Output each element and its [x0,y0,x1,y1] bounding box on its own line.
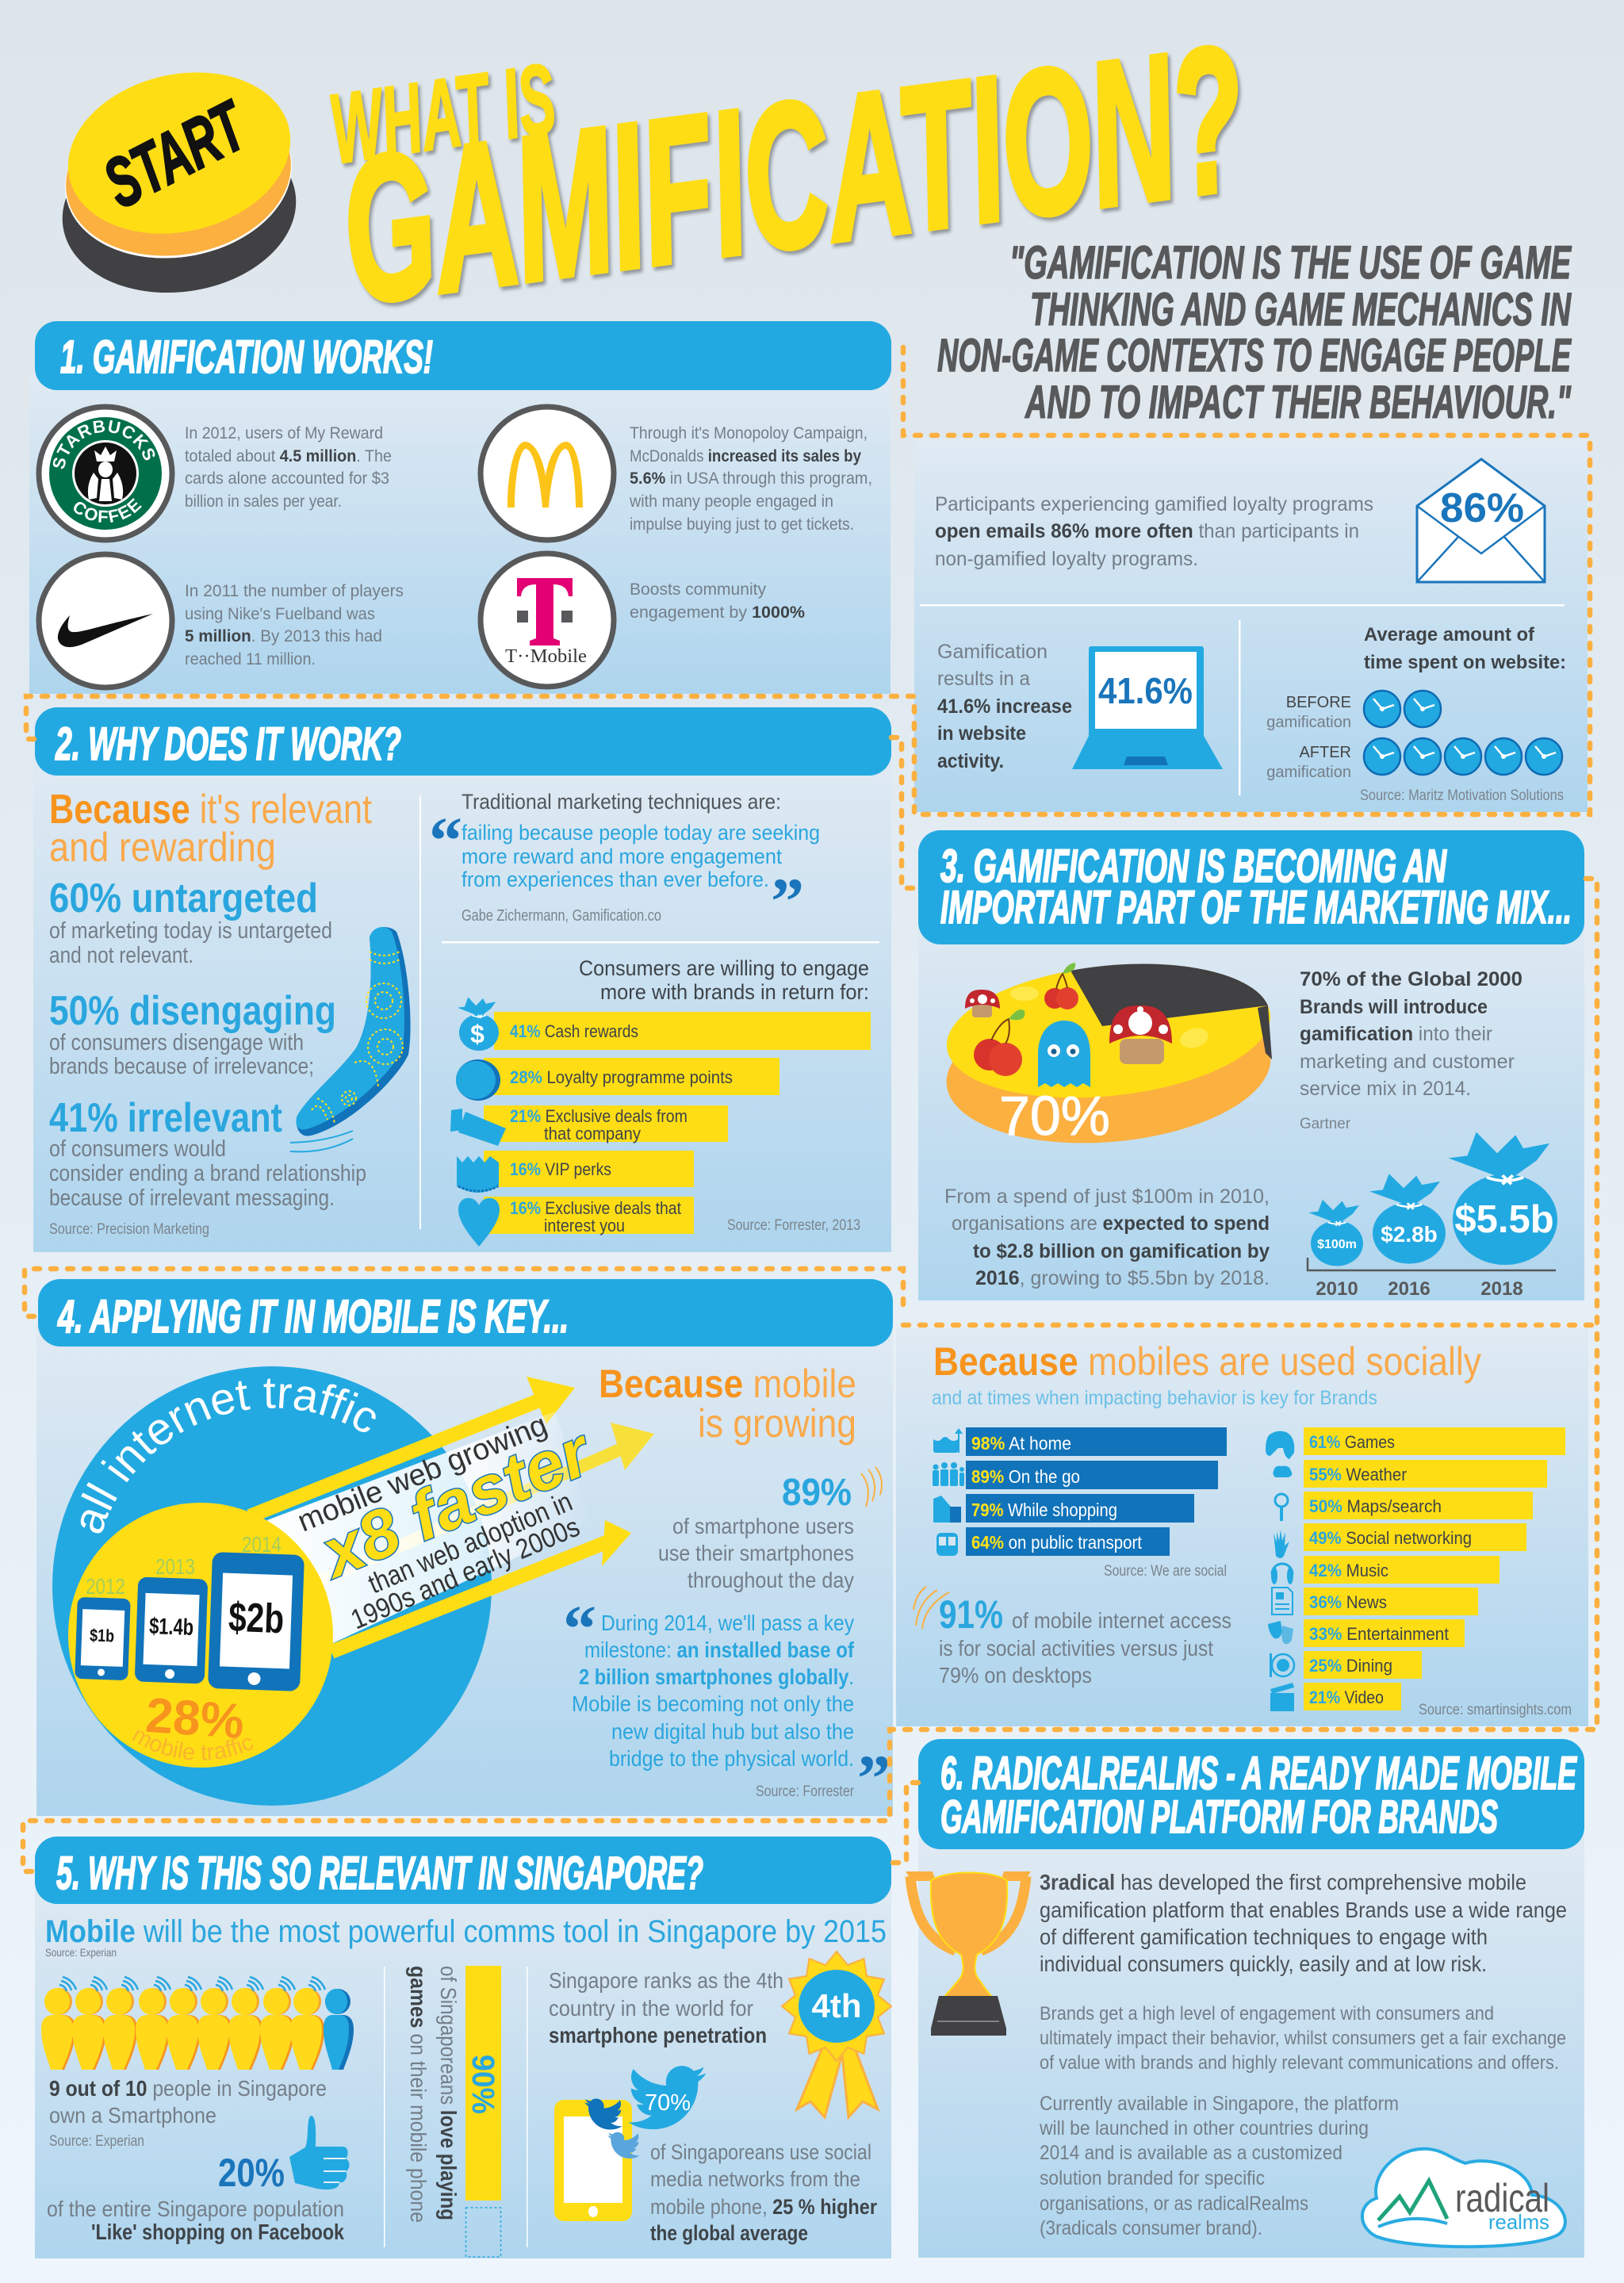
phone 2013 [135,1577,208,1684]
phone 2012 [75,1597,131,1680]
bar chart: where mobiles are used: 79% While shopping [971,1500,1117,1520]
spend text: organisations are expected to spend [952,1212,1270,1235]
faster text: 1990s and early 2000s [347,1511,584,1635]
definition quote [937,237,1572,428]
stat: 60% [49,875,332,968]
chart: money bags growth: $5.5b [1454,1198,1554,1241]
stat: 41%: consider ending a brand relationship [49,1161,366,1186]
because mobile: Because mobile [599,1362,856,1406]
facebook text: of the entire Singapore population [47,2197,344,2221]
bar chart: where mobiles are used: 89% On the go [971,1466,1080,1487]
pie chart 70% [940,949,1277,1156]
intro text: of different gamification techniques to engage with [1040,1925,1488,1949]
website text: 41.6% increase [937,695,1072,718]
clock labels [1266,694,1351,781]
brands text: of value with brands and highly relevant communications and offers. [1040,2052,1559,2074]
bar chart: what consumers want [484,1012,871,1235]
orange dashed connector lines [23,347,1597,1871]
faster text: than web adoption in [364,1486,576,1599]
icon: laptop 41.6% [1072,646,1223,769]
stat: 89%: 89% [782,1472,852,1514]
social media text: media networks from the [650,2167,860,2191]
logo: radical realms: radical [1455,2176,1549,2220]
stat: 41%: 41% irrelevant [49,1095,282,1141]
t-mobile text: engagement by 1000% [630,603,805,622]
icons: location [933,1428,964,1556]
availability text [1039,2093,1399,2239]
because relevant: and rewarding [49,825,276,871]
icon: boomerang [290,927,411,1151]
pie chart 70%: 70% [999,1085,1110,1147]
stat: 89%: throughout the day [688,1568,854,1592]
subheading: Mobile will be the most powerful comms tool in Singapore by 2015 [45,1914,887,1949]
mcdonalds text [629,424,872,534]
icon: envelope 86%: 86% [1440,485,1524,531]
heading 2 [35,707,891,776]
ghost [1038,1021,1090,1087]
stat: 89% [658,1467,882,1592]
phone 2014: $2b [228,1595,285,1642]
chart: money bags growth: $100m [1317,1238,1357,1251]
traditional marketing quote [429,790,820,939]
icon: 4th rosette: 4th [812,1987,861,2024]
website text: activity. [937,750,1004,772]
panel: 2 why does it work: Source: Forrester, 2013 [727,1217,860,1234]
bar chart: what consumers want: interest you [544,1216,625,1235]
intro text: gamification platform that enables Brands use a wide range [1040,1898,1567,1922]
spend text: From a spend of just $100m in 2010, [944,1186,1270,1208]
panel: 4 mobile is key [38,1279,893,1816]
traditional marketing quote: Traditional marketing techniques are: [462,790,781,814]
phone years [86,1532,282,1599]
logo: McDonalds [481,407,614,540]
chart: internet traffic circle: all internet traffic [81,1378,376,1534]
t-mobile text: Boosts community [630,580,766,599]
panel: 5 singapore: Source: Experian [45,1946,117,1959]
button label: START [92,85,260,223]
panel backgrounds [29,373,1588,2258]
availability text: Currently available in Singapore, the platform [1040,2093,1399,2115]
icon: cash bag: $ [470,1020,485,1048]
bar chart: where mobiles are used: 98% At home [971,1433,1071,1454]
stat: 50%: of consumers disengage with [49,1030,304,1055]
bar chart: activities: 61% Games [1309,1432,1395,1452]
bar chart: activities: 25% Dining [1309,1656,1392,1676]
panel: 6 radicalrealms [906,1739,1584,2247]
chart: internet traffic circle: mobile traffic [132,1729,254,1760]
nike text: reached 11 million. [185,650,316,668]
source: Source: We are social [1104,1563,1227,1580]
icon: thumbs up [289,2116,350,2189]
smartphone penetration text: smartphone penetration [549,2023,767,2047]
panel: 3 marketing mix [918,830,1584,1300]
logo: Starbucks: STARBUCKS [52,420,155,469]
smartphone penetration text: country in the world for [549,1996,753,2021]
heading 5 [35,1837,891,1904]
chart: internet traffic circle: 28% [144,1688,246,1749]
bar chart: where mobiles are used: 64% on public transport [971,1532,1143,1553]
source: Source: smartinsights.com [1419,1702,1572,1718]
logo: T-Mobile [481,554,614,687]
milestone quote: ” [857,1742,891,1816]
availability text: will be launched in other countries during [1039,2117,1369,2139]
milestone quote: new digital hub but also the [611,1719,854,1744]
stat: 60%: 60% untargeted [49,875,318,921]
heading 1 [35,321,891,390]
milestone quote: “ [563,1592,596,1666]
small mushroom [965,990,1000,1017]
chart: internet traffic circle [52,1366,654,1806]
availability text: 2014 and is available as a customized [1040,2142,1342,2164]
stat: 41%: because of irrelevant messaging. [49,1186,335,1211]
global 2000 text: Brands will introduce [1300,996,1488,1018]
clock labels: BEFORE [1286,694,1351,711]
panel: because mobiles are used socially [914,1339,1572,1718]
starbucks text: totaled about 4.5 million. The [185,447,392,465]
stat: 9 of 10: own a Smartphone [49,2103,216,2128]
bar: 90% love playing games [406,1966,501,2257]
spend text: to $2.8 billion on gamification by [973,1240,1270,1262]
phone years: 2012 [86,1574,125,1599]
traditional marketing quote: “ [429,804,462,878]
bar chart: where mobiles are used [966,1427,1227,1556]
phone 2014 [208,1552,304,1691]
logo: radical realms [1362,2149,1565,2247]
milestone quote: Mobile is becoming not only the [572,1691,854,1716]
title: WHAT IS [324,44,562,185]
icon: cash bag [458,998,499,1051]
icon: ticket [450,1109,506,1146]
milestone quote [563,1592,891,1816]
panel: email and website stats [920,459,1566,804]
nike text: 5 million. By 2013 this had [185,627,382,645]
social media text [650,2140,877,2245]
consumers heading: more with brands in return for: [600,980,869,1004]
icon: heart [458,1198,500,1247]
stat: 89%: use their smartphones [658,1541,854,1565]
phone years: 2013 [155,1554,195,1579]
stat: 91%: 79% on desktops [939,1663,1092,1687]
mcdonalds text: 5.6% in USA through this program, [630,469,872,488]
time on website heading: Average amount of [1364,624,1535,645]
because relevant: Because it's relevant [49,787,372,833]
traditional marketing quote: ” [771,865,804,939]
source: Source: Maritz Motivation Solutions [1360,787,1564,804]
smartphone penetration text: Singapore ranks as the 4th [549,1968,783,1993]
traditional marketing quote: Gabe Zichermann, Gamification.co [462,907,661,925]
consumers heading: Consumers are willing to engage [579,956,869,980]
icons: activities [1266,1431,1294,1711]
global 2000 text [1300,968,1522,1132]
nike text [185,582,404,668]
stat: 60%: of marketing today is untargeted [49,918,332,944]
faster text: x8 faster [308,1412,603,1593]
phone years: 2014 [242,1532,282,1557]
because relevant [49,787,372,871]
spend text: 2016, growing to $5.5bn by 2018. [975,1267,1270,1289]
logo: Starbucks: COFFEE [74,498,142,523]
starbucks text: cards alone accounted for $3 [185,469,389,488]
time on website heading [1364,624,1566,673]
stat: 9 of 10 [49,2076,327,2150]
heading 3 [918,830,1584,944]
bar chart: activities: 50% Maps/search [1309,1496,1442,1516]
stat: 20%: 20% [218,2151,285,2195]
icon: phone with twitter birds: 70% [645,2090,691,2116]
stat: 41%: Source: Precision Marketing [49,1221,209,1238]
website text: Gamification [937,641,1048,663]
bar: 90% love playing games: 90% [465,2055,500,2114]
stat: 9 of 10: 9 out of 10 people in Singapore [49,2076,327,2101]
stat: 9 of 10: Source: Experian [49,2133,144,2150]
intro text: individual consumers quickly, easily and at low risk. [1040,1952,1487,1976]
heading 2: 2. WHY DOES IT WORK? [55,718,401,770]
brands text: ultimately impact their behavior, whilst consumers get a fair exchange [1040,2028,1566,2049]
source: Source: Forrester [756,1783,855,1800]
pictogram: 9 out of 10 people [41,1977,354,2070]
facebook text: 'Like' shopping on Facebook [91,2220,344,2244]
clock labels: gamification [1266,714,1351,731]
global 2000 text: Gartner [1300,1116,1351,1132]
stat: 89%: of smartphone users [672,1514,854,1538]
availability text: (3radicals consumer brand). [1040,2217,1262,2239]
social media text: mobile phone, 25 % higher [650,2195,877,2219]
panel: 1 gamification works [35,321,891,690]
bar chart: what consumers want: 21% Exclusive deals from [510,1106,688,1126]
stat: 91%: is for social activities versus just [939,1636,1213,1661]
start button [52,52,307,308]
intro text [1040,1870,1567,1976]
icon: loyalty coin [456,1059,500,1101]
because mobile [599,1362,856,1446]
brands text: Brands get a high level of engagement with consumers and [1040,2003,1494,2024]
milestone quote: 2 billion smartphones globally. [579,1664,854,1689]
heading 5: 5. WHY IS THIS SO RELEVANT IN SINGAPORE? [56,1848,703,1899]
chart: money bags growth: 2018 [1480,1278,1523,1300]
nike text: using Nike's Fuelband was [185,605,375,623]
starbucks text [185,424,392,511]
t-mobile text [630,580,805,622]
clock labels: gamification [1266,764,1351,781]
icon: laptop 41.6%: 41.6% [1098,670,1193,711]
website text: in website [937,722,1026,745]
smartphone penetration text [549,1968,783,2047]
brands text [1040,2003,1566,2074]
bar chart: activities: 49% Social networking [1309,1528,1472,1548]
subheading: and at times when impacting behavior is key for Brands [932,1387,1377,1409]
bar chart: activities: 42% Music [1309,1561,1388,1580]
mcdonalds text: McDonalds increased its sales by [630,447,861,465]
heading 1: 1. GAMIFICATION WORKS! [60,331,433,383]
chart: money bags growth: $2.8b [1381,1222,1438,1247]
bar chart: activities: 33% Entertainment [1309,1624,1449,1644]
cherries [974,963,1210,1076]
global 2000 text: gamification into their [1300,1023,1492,1045]
mcdonalds text: impulse buying just to get tickets. [630,515,854,534]
social media text: of Singaporeans use social [650,2140,871,2164]
intro text: 3radical has developed the first comprehensive mobile [1040,1870,1526,1894]
stat: 41%: of consumers would [49,1136,226,1162]
chart: money bags growth: 2010 [1316,1278,1358,1300]
mcdonalds text: Through it's Monopoloy Campaign, [630,424,868,442]
bar chart: activities [1304,1427,1565,1710]
starbucks text: In 2012, users of My Reward [185,424,383,442]
bar chart: activities: 21% Video [1309,1687,1384,1707]
heading 6 [918,1739,1584,1849]
traditional marketing quote: failing because people today are seeking [462,821,820,845]
phone 2013: $1.4b [149,1614,194,1641]
stat: 91%: 91% [939,1592,1003,1637]
faster text: mobile web growing [293,1408,552,1538]
global 2000 text: service mix in 2014. [1300,1078,1471,1100]
time on website heading: time spent on website: [1364,652,1566,673]
big mushroom [1109,1006,1172,1064]
icon: trophy [906,1871,1031,2036]
logo: T-Mobile: T··Mobile [505,646,587,667]
logo: Starbucks [36,404,174,542]
heading: Because mobiles are used socially [933,1339,1481,1384]
bar chart: activities: 36% News [1309,1592,1387,1612]
chart: money bags growth [1308,1132,1557,1300]
nike text: In 2011 the number of players [185,582,404,600]
stat: 60%: and not relevant. [49,943,193,968]
availability text: solution branded for specific [1040,2167,1265,2189]
panel: 5 singapore [35,1837,891,2257]
icon: envelope 86% [1417,459,1545,582]
growth arrows [250,1377,654,1652]
consumers heading [579,956,869,1004]
website text: results in a [937,668,1030,690]
starbucks text: billion in sales per year. [185,492,342,511]
mcdonalds text: with many people engaged in [629,492,833,511]
milestone quote: milestone: an installed base of [584,1638,855,1662]
bar chart: what consumers want: that company [544,1124,641,1143]
phone 2012: $1b [90,1625,115,1646]
email text: non-gamified loyalty programs. [935,548,1198,570]
icon: phone with twitter birds [554,2066,706,2221]
heading 4: 4. APPLYING IT IN MOBILE IS KEY... [57,1291,569,1343]
stat: 91%: of mobile internet access [1012,1608,1231,1633]
availability text: organisations, or as radicalRealms [1040,2193,1308,2215]
panel: 2 why does it work [35,707,891,1247]
bar chart: what consumers want: 16% Exclusive deals that [510,1198,681,1218]
traditional marketing quote: more reward and more engagement [462,845,782,868]
stat: 50%: brands because of irrelevance; [49,1054,314,1079]
logo: radical realms: realms [1488,2210,1549,2234]
bar chart: what consumers want: 41% Cash rewards [510,1021,638,1041]
stat: 50%: 50% disengaging [49,988,336,1034]
bar: 90% love playing games: of Singaporeans love playing [436,1966,461,2220]
clocks [1364,691,1562,775]
stat: 41% [49,1095,366,1238]
facebook text [47,2197,344,2244]
because mobile: is growing [698,1401,856,1446]
logo: Nike [39,554,172,688]
bar chart: activities: 55% Weather [1309,1465,1407,1484]
global 2000 text: marketing and customer [1300,1051,1515,1073]
chart: money bags growth: 2016 [1388,1278,1431,1300]
social media text: the global average [650,2221,808,2245]
milestone quote: bridge to the physical world. [609,1746,854,1771]
email text: Participants experiencing gamified loyalty programs [935,493,1373,515]
stat: 50% [49,988,336,1079]
stat: 91% [914,1587,1231,1687]
bar chart: what consumers want: 16% VIP perks [510,1159,611,1179]
milestone quote: During 2014, we'll pass a key [601,1611,854,1635]
email text: open emails 86% more often than participants in [935,520,1359,542]
icon: 4th rosette [782,1952,891,2117]
clock labels: AFTER [1299,744,1351,761]
bar: 90% love playing games: games on their mobile phone [406,1966,431,2223]
email text [935,493,1373,570]
bar chart: what consumers want: 28% Loyalty programme points [510,1067,733,1087]
icon: crown [457,1156,499,1193]
spend text [944,1186,1270,1289]
website text [937,641,1072,772]
traditional marketing quote: from experiences than ever before. [462,868,769,891]
global 2000 text: 70% of the Global 2000 [1300,968,1522,990]
